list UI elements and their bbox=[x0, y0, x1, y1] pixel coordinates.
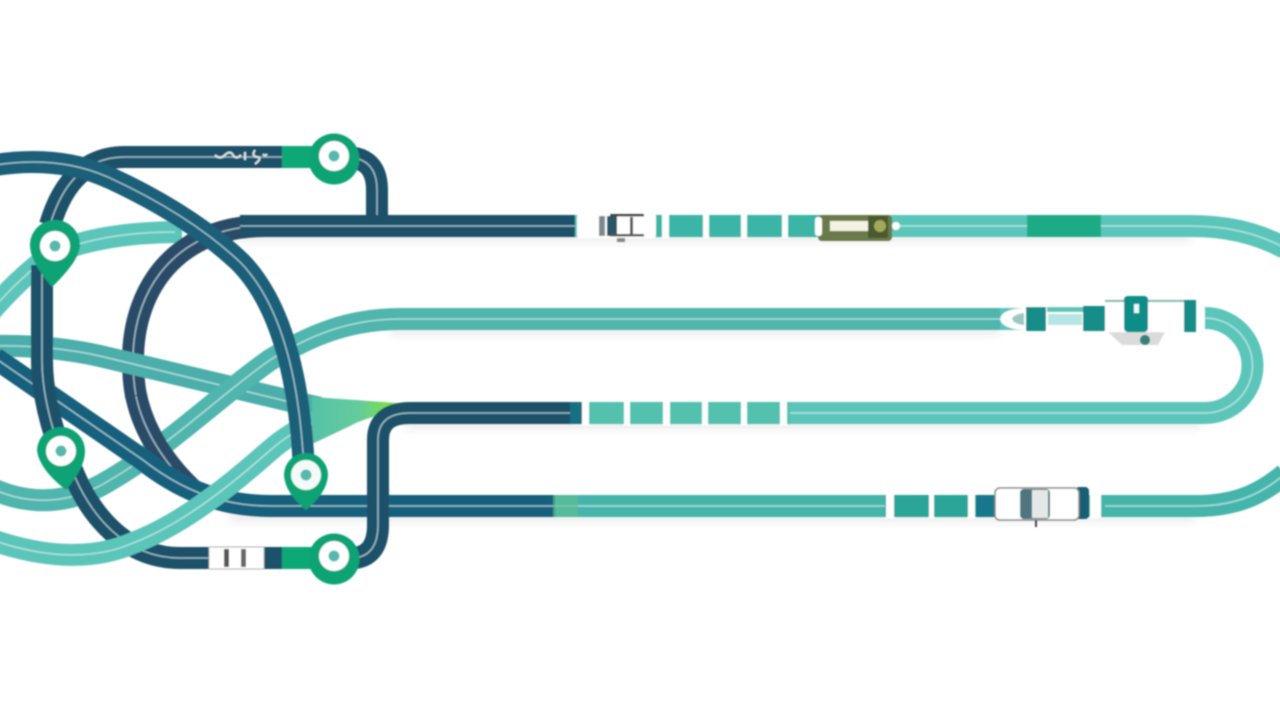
car: white lower left lane bbox=[209, 547, 264, 569]
road: dark loop lower arc over teal bbox=[136, 395, 195, 492]
pin: upper left bbox=[30, 220, 80, 287]
road: teal lower sweep bbox=[0, 418, 325, 555]
road: bottom teal lane bbox=[553, 474, 1280, 517]
car: olive top lane bbox=[815, 215, 900, 241]
crosswalk: middle lane bbox=[570, 401, 790, 425]
road: lower dark diagonal to bottom lane bbox=[0, 358, 556, 506]
car: truck on middle lane bbox=[1000, 296, 1196, 345]
road: middle teal lane with hairpin bbox=[580, 318, 1252, 413]
road: dark vertical to middle lane bbox=[355, 413, 582, 558]
road: dark loop from upper junction bbox=[133, 226, 575, 396]
road: shadow under the network bbox=[230, 231, 1200, 511]
road: green merge area bbox=[312, 397, 398, 444]
crosswalk: bottom lane bbox=[885, 494, 1101, 518]
crosswalk: top lane bbox=[662, 214, 788, 238]
pin: bottom right bbox=[282, 534, 360, 584]
pin: top right bbox=[282, 134, 360, 184]
road: long dark second lane bbox=[42, 157, 377, 558]
road: dark arc through junction bbox=[0, 162, 304, 470]
road: top lane teal section bbox=[575, 215, 1280, 248]
car: white bottom lane bbox=[976, 487, 1089, 527]
small vehicle: upper road marking bbox=[215, 150, 267, 164]
pin: lower left bbox=[37, 427, 85, 490]
road: teal wave to merge bbox=[0, 346, 320, 408]
road: top lane dark section bbox=[240, 215, 580, 237]
pin: centre bbox=[284, 453, 328, 510]
road: teal sine to middle lane bbox=[0, 319, 1002, 500]
road: teal curve upper left bbox=[0, 232, 182, 312]
car: white top lane bbox=[577, 214, 662, 242]
